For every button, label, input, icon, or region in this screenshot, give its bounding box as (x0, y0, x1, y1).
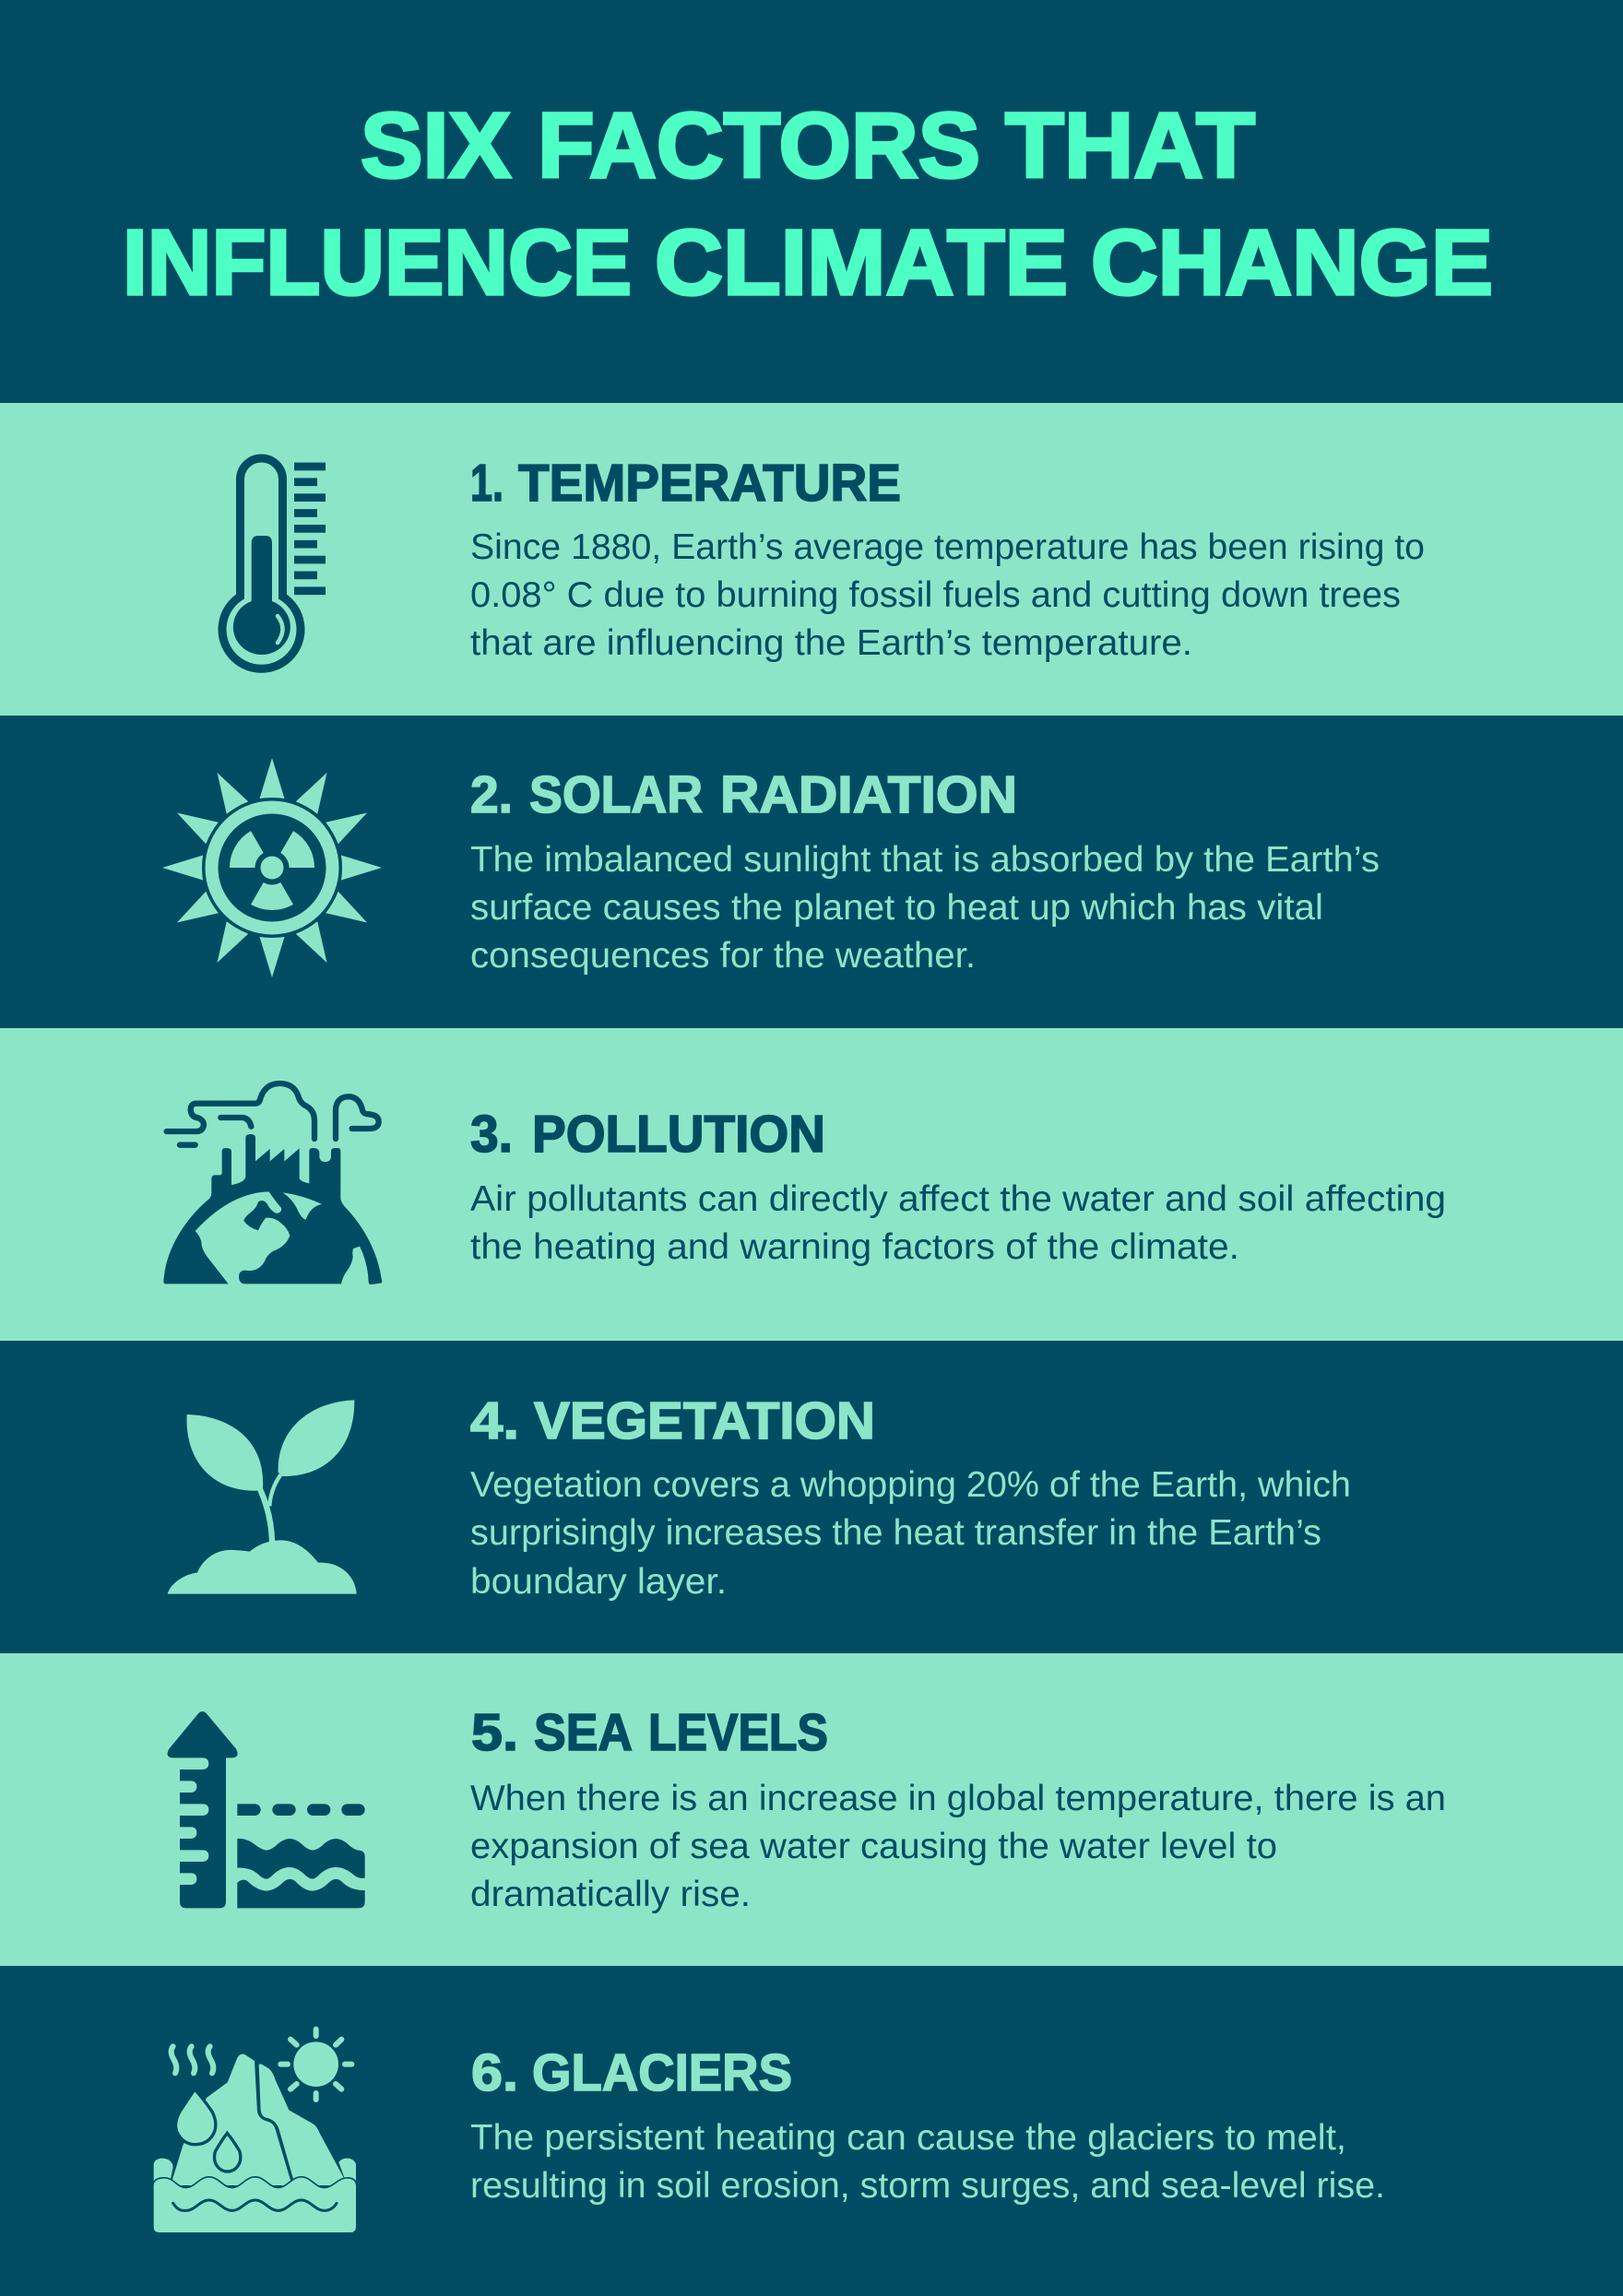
title: THAT (1005, 94, 1255, 197)
title: CHANGE (1091, 211, 1493, 314)
heading: temperature: 1. (470, 454, 503, 513)
text: solar radiation (470, 840, 1380, 976)
heading: solar radiation: SOLAR (529, 765, 703, 824)
text: vegetation: Vegetation covers a whopping 20% of the Earth, which (470, 1465, 1351, 1505)
panel: temperature (0, 403, 1623, 716)
heading: glaciers: 6. (471, 2043, 518, 2102)
heading: sea levels (471, 1703, 828, 1762)
text: sea levels: expansion of sea water causing the water level to (470, 1827, 1277, 1866)
heading: vegetation: VEGETATION (534, 1391, 875, 1450)
heading: solar radiation: RADIATION (720, 765, 1017, 824)
heading: pollution: 3. (470, 1105, 513, 1164)
icon: thermometer (222, 458, 326, 669)
heading: solar radiation (470, 765, 1017, 824)
text: glaciers (470, 2118, 1385, 2206)
text: temperature: Since 1880, Earth’s average temperature has been rising to (470, 527, 1425, 567)
text: sea levels: When there is an increase in global temperature, there is an (470, 1779, 1446, 1818)
heading: sea levels: SEA (534, 1703, 633, 1762)
text: glaciers: The persistent heating can cause the glaciers to melt, (470, 2118, 1346, 2158)
text: sea levels: dramatically rise. (470, 1875, 751, 1914)
text: pollution (470, 1179, 1446, 1267)
icon: melting glacier (154, 2030, 356, 2232)
text: pollution: Air pollutants can directly affect the water and soil affecting (470, 1179, 1446, 1219)
text: sea levels (470, 1779, 1446, 1914)
title: SIX (361, 94, 511, 197)
text: solar radiation: The imbalanced sunlight that is absorbed by the Earth’s (470, 840, 1380, 880)
heading: solar radiation: 2. (470, 765, 513, 824)
title: FACTORS (538, 94, 980, 197)
panel: glaciers (154, 2030, 1385, 2232)
text: temperature: that are influencing the Earth’s temperature. (470, 623, 1192, 663)
title (123, 94, 1493, 314)
icon: sprout (168, 1400, 357, 1594)
text: glaciers: resulting in soil erosion, storm surges, and sea-level rise. (470, 2166, 1385, 2206)
heading: sea levels: 5. (471, 1703, 518, 1762)
heading: pollution: POLLUTION (532, 1105, 825, 1164)
heading: glaciers: GLACIERS (532, 2043, 792, 2102)
text: temperature: 0.08° C due to burning fossil fuels and cutting down trees (470, 575, 1401, 615)
title: INFLUENCE (123, 211, 632, 314)
panel: sea levels (0, 1653, 1623, 1966)
panel: vegetation (168, 1391, 1351, 1602)
heading: vegetation: 4. (470, 1391, 519, 1450)
text: vegetation: boundary layer. (470, 1562, 727, 1602)
text: pollution: the heating and warning factors of the climate. (470, 1227, 1239, 1267)
icon: rising sea level (168, 1711, 365, 1908)
icon: radioactive sun (162, 758, 382, 977)
title: CLIMATE (655, 211, 1068, 314)
icon: polluted earth (163, 1083, 382, 1284)
text: vegetation (470, 1465, 1351, 1602)
text: solar radiation: consequences for the weather. (470, 936, 976, 976)
text: vegetation: surprisingly increases the heat transfer in the Earth’s (470, 1513, 1321, 1553)
text: solar radiation: surface causes the planet to heat up which has vital (470, 888, 1323, 928)
panel: pollution (0, 1028, 1623, 1341)
text: temperature (470, 527, 1425, 663)
heading: temperature: TEMPERATURE (518, 454, 901, 513)
panel: solar radiation (162, 758, 1380, 977)
heading: sea levels: LEVELS (648, 1703, 828, 1762)
